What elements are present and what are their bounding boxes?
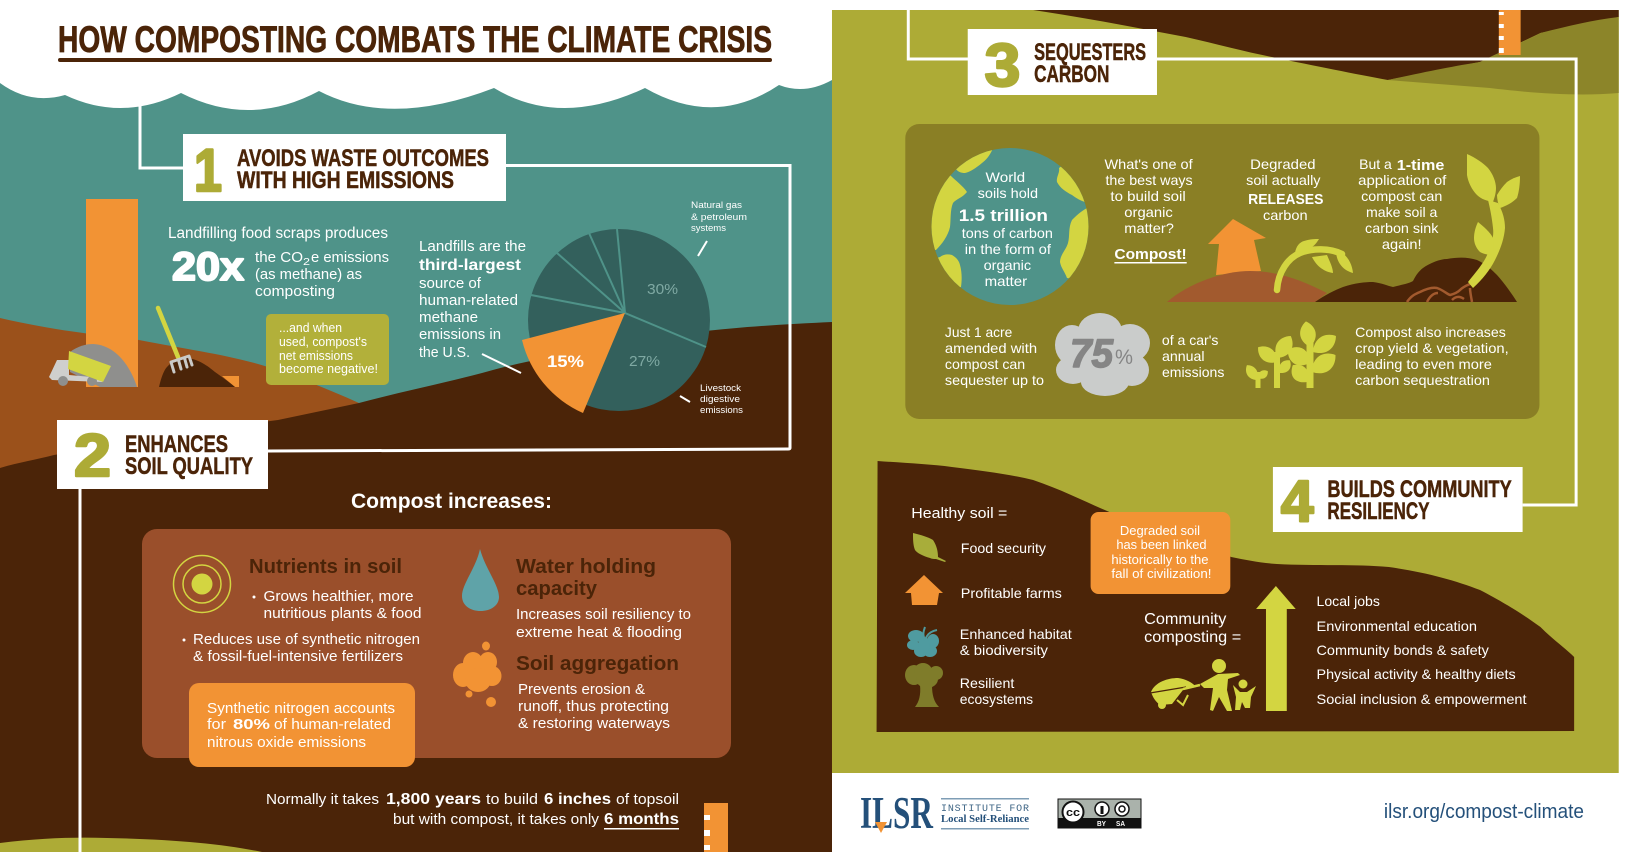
text: enhanced habitat: Enhanced habitat xyxy=(960,626,1072,642)
text: car emissions xyxy=(1162,332,1224,380)
text: landfilling produces 20x: 20x xyxy=(172,245,244,289)
text: best way to build soil: organic xyxy=(1124,204,1173,220)
callout: net emissions negative: used, compost's xyxy=(279,335,367,349)
text: one-time application: application of xyxy=(1358,172,1446,188)
icon: house xyxy=(905,575,943,605)
text: one acre sequesters: compost can xyxy=(945,356,1025,372)
callout: synthetic nitrogen 80% xyxy=(189,683,415,767)
text: crop yield: crop yield & vegetation, xyxy=(1355,340,1509,356)
connector: section 1 xyxy=(140,106,790,451)
text: topsoil comparison: but with compost, it takes only xyxy=(393,811,600,828)
list: community benefits: Environmental education xyxy=(1317,618,1477,634)
icon: wheelbarrow and people xyxy=(1150,659,1256,711)
list: community benefits: Social inclusion & empowerment xyxy=(1317,691,1527,707)
text: crop yield: carbon sequestration xyxy=(1355,372,1490,388)
connector: section 3 xyxy=(908,10,1576,505)
text: third-largest source: Landfills are the xyxy=(419,238,526,255)
text: nutrients in soil xyxy=(182,556,422,665)
section 4 heading: BUILDS COMMUNITY xyxy=(1327,476,1512,503)
text: resilient ecosystems: ecosystems xyxy=(960,691,1033,707)
text: water holding capacity: capacity xyxy=(516,578,598,600)
footer url: ilsr.org/compost-climate xyxy=(1384,801,1584,823)
section 1 heading: 1 xyxy=(194,137,222,204)
section 2 heading: SOIL QUALITY xyxy=(125,453,253,480)
text: best way to build soil xyxy=(1104,156,1193,264)
panel: soil benefits xyxy=(142,529,731,767)
icon: orange pipe bottom xyxy=(704,803,728,852)
list: community benefits: Physical activity & healthy diets xyxy=(1317,666,1516,682)
icon: globe: in the form of xyxy=(965,241,1051,257)
pie label: livestock: emissions xyxy=(700,405,743,416)
text: degraded soil releases carbon: soil actually xyxy=(1246,172,1321,188)
section 1 heading: AVOIDS WASTE OUTCOMES xyxy=(237,145,489,172)
text: water holding capacity: Water holding xyxy=(516,556,656,578)
text: enhanced habitat xyxy=(960,626,1072,658)
text: degraded soil releases carbon: carbon xyxy=(1263,207,1308,223)
icon: butterfly xyxy=(907,627,939,657)
text: water holding capacity: Increases soil resiliency to xyxy=(516,606,691,623)
heading: compost increases: Compost increases: xyxy=(351,490,552,513)
pie label: natural gas: systems xyxy=(691,223,726,234)
callout: net emissions negative: ...and when xyxy=(279,321,342,335)
text: crop yield: leading to even more xyxy=(1355,356,1492,372)
pie label: natural gas: & petroleum xyxy=(691,212,747,223)
text: car emissions: of a car's xyxy=(1162,332,1218,348)
text: soil aggregation: Prevents erosion & xyxy=(518,681,645,698)
section 4 heading: RESILIENCY xyxy=(1327,498,1430,525)
icon: soil aggregate xyxy=(453,642,502,707)
section 2 heading xyxy=(57,420,268,489)
pie label: livestock xyxy=(680,383,743,416)
text: one acre sequesters: sequester up to xyxy=(945,372,1044,388)
pie label: livestock: Livestock xyxy=(700,383,741,394)
list: community benefits: Community bonds & safety xyxy=(1317,642,1489,658)
arrow: community benefits xyxy=(1256,586,1296,711)
section 3 heading: SEQUESTERS xyxy=(1034,39,1146,66)
text: one-time application: compost can xyxy=(1361,188,1442,204)
icon: globe: matter xyxy=(985,273,1028,289)
text: nutrients in soil: nutritious plants & food xyxy=(264,605,422,622)
text: community composting xyxy=(1144,611,1241,646)
text: third-largest source xyxy=(419,238,526,373)
text: water holding capacity xyxy=(516,556,691,641)
pie label: natural gas xyxy=(691,200,747,256)
text: food security: Food security xyxy=(961,540,1046,556)
text: nutrients in soil: Reduces use of synthetic nitrogen xyxy=(193,631,420,648)
text: topsoil comparison: of topsoil xyxy=(616,791,679,808)
logo: ILSR: Local Self-Reliance xyxy=(941,813,1029,825)
logo: ILSR xyxy=(860,788,1029,838)
text: landfilling produces 20x: e emissions xyxy=(311,249,389,266)
text: third-largest source: the U.S. xyxy=(419,344,470,361)
text: landfilling produces 20x: 2 xyxy=(303,257,311,268)
text: crop yield xyxy=(1355,324,1509,388)
list: community benefits: Local jobs xyxy=(1317,593,1380,609)
logo: ILSR: INSTITUTE FOR xyxy=(941,804,1029,815)
logo: creative commons: SA xyxy=(1116,821,1125,828)
text: community composting: composting = xyxy=(1144,629,1241,646)
pie label: natural gas: Natural gas xyxy=(691,200,742,211)
icon: globe: organic xyxy=(984,257,1031,273)
callout: net emissions negative: become negative! xyxy=(279,362,378,376)
icon: globe: soils hold xyxy=(978,185,1038,201)
logo: ILSR: ILSR xyxy=(860,788,933,838)
text: landfilling produces 20x xyxy=(168,225,389,300)
illustration: degraded soil with arrow xyxy=(1167,219,1353,302)
text: nutrients in soil: Grows healthier, more xyxy=(264,588,414,605)
text: best way to build soil: to build soil xyxy=(1110,188,1186,204)
section 3 heading: 3 xyxy=(985,32,1020,99)
text: landfilling produces 20x: the CO xyxy=(255,249,303,266)
text: topsoil comparison xyxy=(266,791,679,830)
icon: tree xyxy=(905,663,943,707)
text: third-largest source: source of xyxy=(419,275,482,292)
panel: right side background xyxy=(832,10,1619,773)
panel: community hill xyxy=(877,461,1574,732)
pie chart: methane sources: 27% xyxy=(629,353,660,370)
callout: degraded soil civilization xyxy=(1091,512,1230,594)
text: topsoil comparison: 6 inches xyxy=(544,791,611,808)
right half of the infographic xyxy=(832,10,1619,823)
text: best way to build soil: What's one of xyxy=(1104,156,1193,172)
pie chart: methane sources: 30% xyxy=(647,281,678,298)
callout: degraded soil civilization: historically to the xyxy=(1111,552,1209,567)
text: profitable farms: Profitable farms xyxy=(961,585,1062,601)
callout: synthetic nitrogen 80%: nitrous oxide emissions xyxy=(207,734,366,751)
icon: globe: 1.5 trillion xyxy=(959,206,1048,225)
logo: creative commons: cc xyxy=(1066,807,1080,819)
connector: section 2 xyxy=(78,489,82,852)
text: third-largest source: human-related xyxy=(419,292,518,309)
callout: net emissions negative xyxy=(266,314,389,385)
icon: nutrients target xyxy=(174,556,230,612)
logo: creative commons xyxy=(1058,799,1141,828)
text: nutrients in soil: & fossil-fuel-intensive fertilizers xyxy=(193,648,403,665)
callout: degraded soil civilization: has been linked xyxy=(1116,537,1207,552)
text: topsoil comparison: to build xyxy=(486,791,538,808)
panel: left side landscape xyxy=(0,0,832,852)
text: degraded soil releases carbon: Degraded xyxy=(1250,156,1316,172)
text: one acre sequesters xyxy=(945,324,1044,388)
section 2 heading: 2 xyxy=(74,422,111,489)
pie chart: methane sources: 15% xyxy=(547,352,584,371)
pie label: livestock: digestive xyxy=(700,394,740,405)
icon: cloud with 75%: 75 xyxy=(1070,332,1114,376)
section 4 heading: 4 xyxy=(1281,470,1314,534)
text: landfilling produces 20x: Landfilling food scraps produces xyxy=(168,225,388,242)
text: enhanced habitat: & biodiversity xyxy=(960,642,1048,658)
text: topsoil comparison: 1,800 years xyxy=(386,791,481,808)
icon: globe: World xyxy=(986,169,1025,185)
callout: synthetic nitrogen 80%: of human-related xyxy=(274,716,391,733)
text: healthy soil heading: Healthy soil = xyxy=(911,505,1007,522)
text: one acre sequesters: amended with xyxy=(945,340,1037,356)
callout: degraded soil civilization: Degraded soil xyxy=(1120,523,1200,538)
icon: three plants xyxy=(1243,320,1341,388)
text: soil aggregation xyxy=(516,653,679,732)
pie chart: methane sources xyxy=(522,229,710,413)
title: HOW COMPOSTING COMBATS THE CLIMATE CRISIS xyxy=(58,19,772,60)
text: topsoil comparison: Normally it takes xyxy=(266,791,379,808)
icon: cloud with 75% xyxy=(1055,313,1150,396)
text: degraded soil releases carbon xyxy=(1246,156,1323,223)
text: topsoil comparison: 6 months xyxy=(604,811,679,828)
section 3 heading xyxy=(968,29,1157,99)
list: community benefits xyxy=(1317,593,1527,707)
text: one-time application: 1-time xyxy=(1397,157,1444,174)
section 3 heading: CARBON xyxy=(1034,61,1109,88)
text: car emissions: annual xyxy=(1162,348,1205,364)
text: water holding capacity: extreme heat & flooding xyxy=(516,624,682,641)
section 4 heading xyxy=(1273,467,1523,534)
text: community composting: Community xyxy=(1144,611,1226,628)
logo: creative commons: BY xyxy=(1097,821,1106,828)
text: soil aggregation: runoff, thus protecting xyxy=(518,698,669,715)
panel: carbon sequestration xyxy=(905,124,1539,419)
callout: degraded soil civilization: fall of civilization! xyxy=(1111,566,1211,581)
text: best way to build soil: the best ways xyxy=(1105,172,1193,188)
text: one-time application: But a xyxy=(1359,156,1392,172)
text: one-time application: carbon sink xyxy=(1365,220,1438,236)
icon: chimney and cement truck xyxy=(49,199,138,387)
illustration: compost mound with plant xyxy=(1315,154,1520,302)
text: crop yield: Compost also increases xyxy=(1355,324,1506,340)
text: third-largest source: emissions in xyxy=(419,326,501,343)
text: third-largest source: methane xyxy=(419,309,478,326)
callout: synthetic nitrogen 80%: 80% xyxy=(233,716,270,733)
text: one-time application xyxy=(1358,156,1446,252)
icon: globe: tons of carbon xyxy=(962,225,1053,241)
icon: globe xyxy=(925,145,1095,305)
icon: water drop xyxy=(462,549,499,611)
text: best way to build soil: matter? xyxy=(1124,220,1174,236)
text: resilient ecosystems xyxy=(960,675,1033,707)
callout: synthetic nitrogen 80%: Synthetic nitrogen accounts xyxy=(207,700,395,717)
text: landfilling produces 20x: (as methane) as xyxy=(255,266,362,283)
section 1 heading xyxy=(183,134,506,204)
text: one-time application: make soil a xyxy=(1366,204,1438,220)
text: soil aggregation: Soil aggregation xyxy=(516,653,679,675)
section 2 heading: ENHANCES xyxy=(125,431,228,458)
section 1 heading: WITH HIGH EMISSIONS xyxy=(237,167,454,194)
text: landfilling produces 20x: composting xyxy=(255,283,335,300)
icon: pitchfork and compost pile xyxy=(158,308,239,387)
text: car emissions: emissions xyxy=(1162,364,1224,380)
text: nutrients in soil: Nutrients in soil xyxy=(249,556,402,578)
text: one acre sequesters: Just 1 acre xyxy=(945,324,1013,340)
callout: synthetic nitrogen 80%: for xyxy=(207,716,226,733)
text: one-time application: again! xyxy=(1382,236,1422,252)
text: degraded soil releases carbon: RELEASES xyxy=(1248,191,1323,208)
text: best way to build soil: Compost! xyxy=(1114,246,1187,263)
text: third-largest source: third-largest xyxy=(419,257,522,274)
callout: net emissions negative: net emissions xyxy=(279,349,353,363)
text: soil aggregation: & restoring waterways xyxy=(518,715,670,732)
icon: leaf xyxy=(913,533,946,562)
text: resilient ecosystems: Resilient xyxy=(960,675,1014,691)
icon: cloud with 75%: % xyxy=(1115,346,1133,369)
